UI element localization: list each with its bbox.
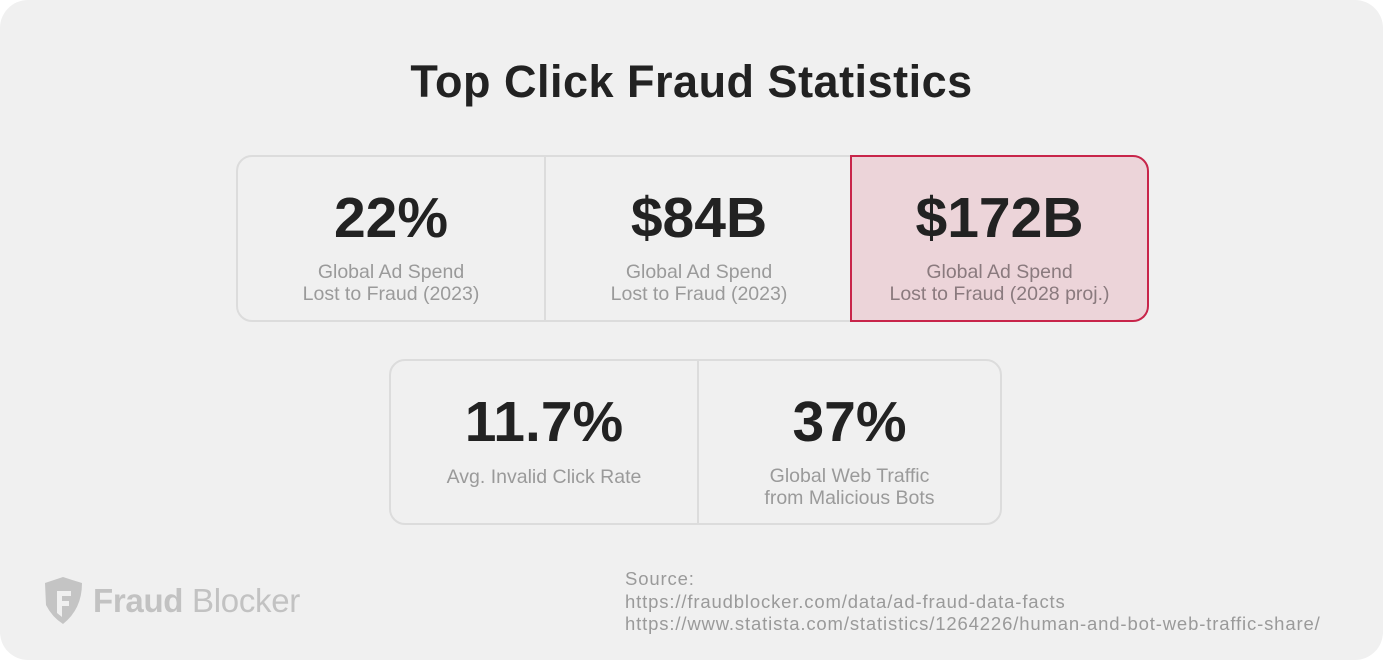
source text: https://www.statista.com/statistics/1264226/human-and-bot-web-traffic-share/ xyxy=(625,613,1321,634)
stat: 22%: 22% xyxy=(334,186,448,250)
source text xyxy=(625,568,1321,634)
stat: $84B xyxy=(611,186,787,305)
logo text: Fraud Blocker xyxy=(93,582,300,619)
panel: bottom row stats xyxy=(389,359,1002,525)
stat: 11.7%: Avg. Invalid Click Rate xyxy=(447,466,641,488)
stat: $84B: Lost to Fraud (2023) xyxy=(611,283,787,305)
stat: $172B highlighted: Global Ad Spend xyxy=(926,261,1073,283)
stat: 37%: 37% xyxy=(792,390,907,454)
stat: 37%: Global Web Traffic xyxy=(770,465,929,487)
stat: 11.7% xyxy=(391,361,699,523)
stat: 22% xyxy=(238,157,546,320)
stat: 22%: Lost to Fraud (2023) xyxy=(303,283,479,305)
stat: $84B: Global Ad Spend xyxy=(626,261,772,283)
stat: 37% xyxy=(764,390,935,509)
stat: $84B: $84B xyxy=(631,186,767,250)
panel: top row stats xyxy=(236,155,1149,322)
stat: 11.7%: 11.7% xyxy=(465,390,623,454)
stat: $172B highlighted xyxy=(850,155,1149,322)
stat: 22%: Global Ad Spend xyxy=(318,261,464,283)
stat: $172B highlighted: Lost to Fraud (2028 proj.) xyxy=(889,283,1110,305)
source text: https://fraudblocker.com/data/ad-fraud-data-facts xyxy=(625,590,1066,612)
source text: Source: xyxy=(625,568,695,589)
stat: $172B highlighted: $172B xyxy=(916,186,1083,250)
stat: 37%: from Malicious Bots xyxy=(764,487,935,509)
title: Top Click Fraud Statistics xyxy=(410,56,973,107)
icon: shield xyxy=(45,577,82,624)
logo: Fraud Blocker xyxy=(45,577,300,624)
